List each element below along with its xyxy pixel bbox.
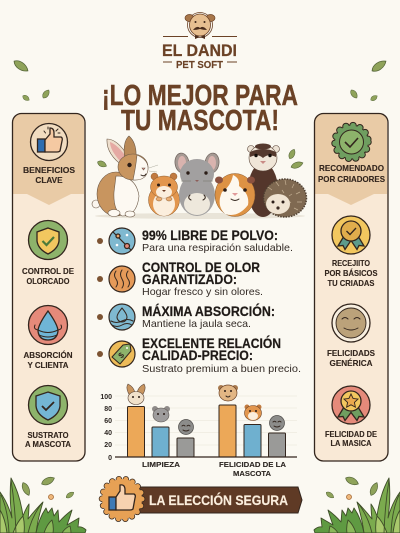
label: felicidads generica: GENÉRICA [330, 358, 373, 368]
label: recejiito por basicos tu criadas: TU CRIADAS [328, 279, 375, 288]
label: recomendado por criadores: RECOMENDADO [319, 164, 385, 173]
benefit: control de olor [97, 260, 263, 298]
logo: El Dandi Pet Soft [162, 12, 237, 71]
panel: beneficios clave [12, 114, 85, 461]
icon: medal check [332, 216, 370, 254]
bar chart: limpieza and felicidad [100, 384, 297, 478]
label: felicidad de la masica: LA MASICA [330, 439, 372, 448]
benefit: 99% libre de polvo: 99% LIBRE DE POLVO: [142, 228, 278, 243]
banner: la eleccion segura: LA ELECCIÓN SEGURA [149, 493, 288, 508]
ribbon [135, 487, 302, 513]
benefit: calidad-precio: EXCELENTE RELACIÓN [142, 336, 281, 351]
x axis labels: MASCOTA [233, 469, 272, 478]
benefit: control de olor: GARANTIZADO: [142, 272, 237, 287]
logo: El Dandi Pet Soft: PET SOFT [176, 59, 224, 71]
y axis labels: 100 [100, 394, 112, 401]
y axis labels: 80 [104, 406, 112, 413]
benefit: control de olor: CONTROL DE OLOR [142, 260, 260, 275]
y axis labels: 40 [104, 430, 112, 437]
icon: thumbs up [30, 124, 68, 160]
illustration: group of pets [92, 136, 306, 219]
ferret [248, 144, 280, 217]
benefit: maxima absorcion [97, 304, 275, 330]
icon: pug with moustache [185, 12, 215, 39]
bar toppers: pet heads [127, 384, 284, 434]
label: recejiito por basicos tu criadas: POR BÁSICOS [324, 268, 378, 278]
icon: absorcion [28, 306, 68, 344]
logo: El Dandi Pet Soft: EL DANDI [162, 41, 237, 60]
label: recomendado por criadores: POR CRIADORES [318, 175, 386, 184]
y axis labels [100, 394, 112, 462]
guinea pig [215, 174, 255, 216]
benefit: calidad-precio: CALIDAD-PRECIO: [142, 348, 253, 363]
icon: thumbs up badge [102, 479, 142, 519]
label: felicidad de la masica: FELICIDAD DE [325, 430, 377, 439]
chinchilla [174, 152, 220, 216]
label: sustrato a mascota: A MASCOTA [25, 440, 71, 449]
y axis labels: 20 [104, 442, 112, 449]
decorative leaves and seeds bottom [20, 475, 380, 500]
label: beneficios clave: CLAVE [35, 176, 63, 185]
benefit: calidad-precio: $ [117, 350, 126, 360]
benefit: maxima absorcion: MÁXIMA ABSORCIÓN: [142, 304, 275, 319]
benefit: 99% libre de polvo [97, 228, 293, 254]
label: control de olorcado: OLORCADO [26, 277, 70, 286]
benefit: control de olor: Hogar fresco y sin olores. [142, 287, 263, 298]
label: absorcion y clienta: ABSORCIÓN [24, 349, 73, 360]
icon: olor shield [28, 220, 68, 260]
icon: sustrato shield [28, 386, 68, 424]
hamster [148, 173, 180, 216]
label: absorcion y clienta: Y CLIENTA [28, 361, 69, 370]
rabbit [92, 136, 158, 217]
label: beneficios clave: BENEFICIOS [23, 166, 76, 175]
grass left [0, 478, 86, 533]
x axis labels: LIMPIEZA [142, 460, 181, 469]
icon: recomendado badge [335, 126, 368, 158]
benefit: calidad-precio [97, 336, 301, 375]
label: recejiito por basicos tu criadas: RECEJIITO [332, 259, 371, 268]
y axis labels: 0 [108, 455, 112, 462]
title: TU MASCOTA! [121, 105, 279, 137]
y axis labels: 60 [104, 418, 112, 425]
label: control de olorcado: CONTROL DE [22, 267, 75, 276]
x axis labels: FELICIDAD DE LA [219, 460, 287, 469]
bars [128, 405, 286, 457]
panel: recomendado por criadores [314, 114, 388, 461]
banner: la eleccion segura [102, 479, 302, 519]
benefit: 99% libre de polvo: Para una respiración saludable. [142, 243, 293, 254]
decorative leaves top [12, 58, 388, 170]
label: felicidads generica: FELICIDADS [327, 349, 376, 358]
title [102, 80, 298, 137]
label: sustrato a mascota: SUSTRATO [28, 431, 69, 440]
hedgehog [264, 179, 306, 217]
icon: star medal [332, 386, 370, 424]
icon: happy face [332, 304, 370, 342]
grass right [314, 478, 400, 533]
title: ¡LO MEJOR PARA [102, 80, 298, 112]
benefit list [97, 228, 301, 375]
benefit: maxima absorcion: Mantiene la jaula seca. [142, 319, 251, 330]
benefit: calidad-precio: Sustrato premium a buen precio. [142, 364, 301, 375]
x axis labels [142, 460, 287, 478]
